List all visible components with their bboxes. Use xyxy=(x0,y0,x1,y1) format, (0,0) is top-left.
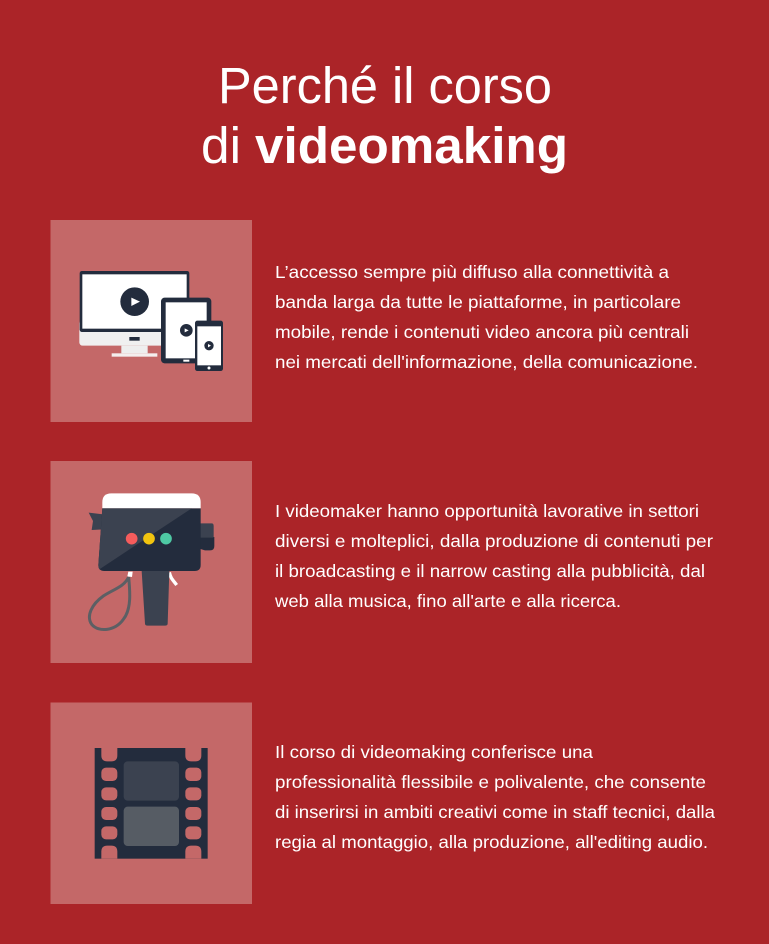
text: devices: banda larga da tutte le piattaforme, in particolare xyxy=(275,292,681,312)
panel: devices xyxy=(50,220,698,422)
text: film strip: di inserirsi in ambiti creativi come in staff tecnici, dalla xyxy=(275,802,715,822)
title xyxy=(201,57,568,174)
text: devices: nei mercati dell'informazione, della comunicazione. xyxy=(275,352,698,372)
text: devices: mobile, rende i contenuti video ancora più centrali xyxy=(275,322,689,342)
text: video camera xyxy=(274,501,713,611)
text: video camera: I videomaker hanno opportunità lavorative in settori xyxy=(275,501,699,521)
text: video camera: diversi e molteplici, dalla produzione di contenuti per xyxy=(275,531,713,551)
text: video camera: web alla musica, fino all'arte e alla ricerca. xyxy=(274,591,621,611)
icon tile: film strip xyxy=(50,702,252,904)
icon: video camera xyxy=(89,493,214,630)
title: Perché il corso xyxy=(218,57,552,114)
panel: video camera xyxy=(50,461,713,663)
title: di xyxy=(201,117,241,174)
text: film strip: Il corso di videomaking conferisce una xyxy=(275,742,593,762)
text: devices xyxy=(275,262,698,372)
text: film strip xyxy=(275,742,715,852)
icon: film strip xyxy=(95,748,208,859)
title: videomaking xyxy=(255,117,568,174)
icon tile: devices xyxy=(50,220,252,422)
icon tile: video camera xyxy=(50,461,252,663)
text: video camera: il broadcasting e il narrow casting alla pubblicità, dal xyxy=(275,561,705,581)
panel: film strip xyxy=(50,702,715,904)
text: devices: L’accesso sempre più diffuso alla connettività a xyxy=(275,262,669,282)
icon: monitor, tablet and phone with play buttons xyxy=(79,271,223,371)
text: film strip: professionalità flessibile e polivalente, che consente xyxy=(275,772,706,792)
text: film strip: regia al montaggio, alla produzione, all'editing audio. xyxy=(275,832,708,852)
